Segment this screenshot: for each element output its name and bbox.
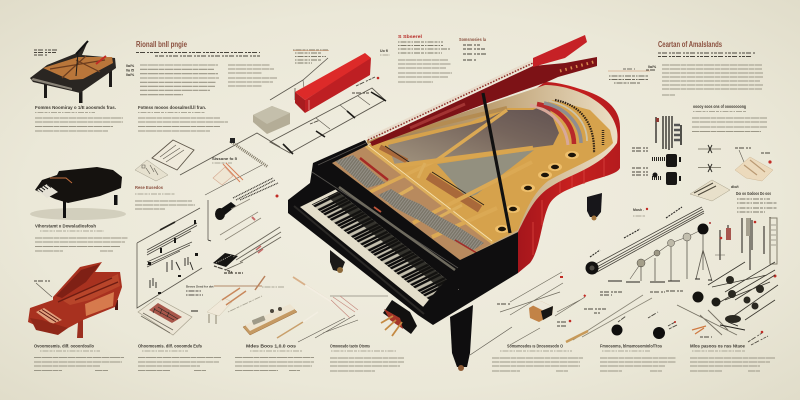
diagram: wires and beige mechanism: dlo/t <box>731 185 739 189</box>
text block: twelfth note: Mlos pasoos os nss Ntaoe <box>690 344 745 350</box>
diagram: upper right rods <box>715 217 777 278</box>
inner rim wall <box>332 85 618 260</box>
text block: third note: Vihorstamt ıı Dowsladiosfosh <box>35 224 96 230</box>
red badge <box>374 207 381 212</box>
title: left column <box>136 40 260 56</box>
diagram: lower right mechanism <box>677 262 778 345</box>
text block: grand piano note: Fomms Noomiray o 1/E aoosmds fras. <box>35 105 116 111</box>
case sheen <box>312 143 458 268</box>
panel: right column title <box>658 40 755 56</box>
title: left column: Rionall bnll pngie <box>136 40 187 49</box>
soundboard lower <box>437 150 534 198</box>
lid mid stripe <box>410 104 465 128</box>
lid top panel <box>533 35 587 67</box>
soundboard top <box>388 103 559 165</box>
plate holes <box>495 151 579 233</box>
lid underside <box>370 57 597 146</box>
panel: small black grand piano, open lid <box>30 41 116 103</box>
text block: third note <box>35 224 128 251</box>
text block: sixth note <box>235 344 314 370</box>
text block: tenth note: Somsmosdos ıs Dnosoosodo O <box>507 344 563 350</box>
red outer rim <box>518 82 620 273</box>
left front leg <box>330 250 345 273</box>
fallboard strip <box>339 187 455 270</box>
black case <box>288 140 518 325</box>
text block: intro: 0a l5 <box>126 68 134 72</box>
diagram: cream hammer and wood plate <box>207 277 388 342</box>
text block: center labels <box>459 37 488 60</box>
text block: intro: 0a/% <box>126 64 135 68</box>
diagram: long ruler and strings: Sissone fo 5 <box>212 157 237 161</box>
panel: red grand piano <box>28 262 122 338</box>
text block: second note: Fotmss mooos doosalmsll.ll fran. <box>138 105 206 111</box>
lid prop stick <box>483 93 510 233</box>
key slip <box>294 206 424 314</box>
front action bed <box>332 146 493 260</box>
wood beams <box>380 146 484 209</box>
diagram: pendulum stands <box>600 222 712 295</box>
diagram: string roller <box>586 207 704 274</box>
diagram: long ruler and strings <box>180 133 280 200</box>
label: right side callout <box>608 65 657 83</box>
text block: fifth note <box>138 344 221 370</box>
text block: tenth note <box>492 344 583 371</box>
text block: fourth note <box>34 344 124 370</box>
rim highlights <box>533 158 604 255</box>
text block: center top: S Sbserel <box>398 34 422 40</box>
damper felts <box>335 155 485 258</box>
text block: fifth note: Ohoomosmis. dilf. oooomde Eufs <box>138 344 202 350</box>
right rear leg <box>587 193 602 220</box>
diagram: sheet with notes: Rese Eusedos <box>135 185 163 191</box>
text block: right intro <box>662 65 763 95</box>
diagram: top ladder, beige and red blocks <box>253 49 390 154</box>
text block: eleventh note <box>600 344 676 371</box>
text block: second note <box>138 105 228 131</box>
line to leg <box>470 327 512 355</box>
keyboard <box>300 190 459 307</box>
lid cream strip <box>368 62 533 139</box>
text block: intro <box>126 64 277 95</box>
pedal lyre <box>381 300 417 336</box>
text block: center top <box>398 34 452 82</box>
diagram: vertical bars and connectors <box>632 116 681 185</box>
diagram: bottom center rollers <box>497 272 677 345</box>
right key cheek <box>423 272 458 322</box>
lid dots <box>368 63 533 140</box>
panel: right column title: Ceartan of Amalslands <box>658 40 722 49</box>
text block: grand piano note <box>35 105 123 131</box>
text block: eighth note: ooooy soos ons of oooooooong <box>693 104 746 110</box>
diagram: wires and beige mechanism <box>690 145 773 201</box>
treble string arcs <box>530 100 603 153</box>
text block: eighth note <box>692 104 767 132</box>
diagram: string roller: Mosh . <box>633 208 644 212</box>
text block: seventh note <box>330 344 404 371</box>
text block: sixth note: Mdes Boos 1,0.0 oos <box>246 344 296 350</box>
diagram: hammers and rollers: Deoos Sosd fsr dot <box>186 284 214 288</box>
text block: intro: 0a/% <box>126 73 135 77</box>
diagram: top ladder, beige and red blocks: Uo fl <box>380 49 388 53</box>
label: right side callout: 0a/% <box>648 65 657 69</box>
big front leg <box>450 305 473 371</box>
text block: ninth note <box>736 191 777 212</box>
text block: seventh note: Omooosdo taoto Otoms <box>330 344 370 350</box>
text block: ninth note: Doı oo Godoos Do oos <box>736 191 771 197</box>
diagram: sheet with notes <box>135 140 195 209</box>
diagram: hammers and rollers <box>186 199 285 295</box>
text block: center labels: Somsnosies la <box>459 37 486 43</box>
diagram: framed staff lines and box <box>137 208 202 335</box>
text block: eleventh note: Fmoosoms, blmsmosomiolo/Ttos <box>600 344 662 350</box>
gold plate base <box>332 100 613 260</box>
panel: closed black grand piano <box>30 167 126 220</box>
plate bars <box>365 108 533 243</box>
text block: fourth note: Ovoomosmis. dilf. oooordosilo <box>34 344 94 350</box>
text block: twelfth note <box>690 344 775 371</box>
lid markings <box>560 61 597 71</box>
panel: main grand piano <box>288 35 620 371</box>
